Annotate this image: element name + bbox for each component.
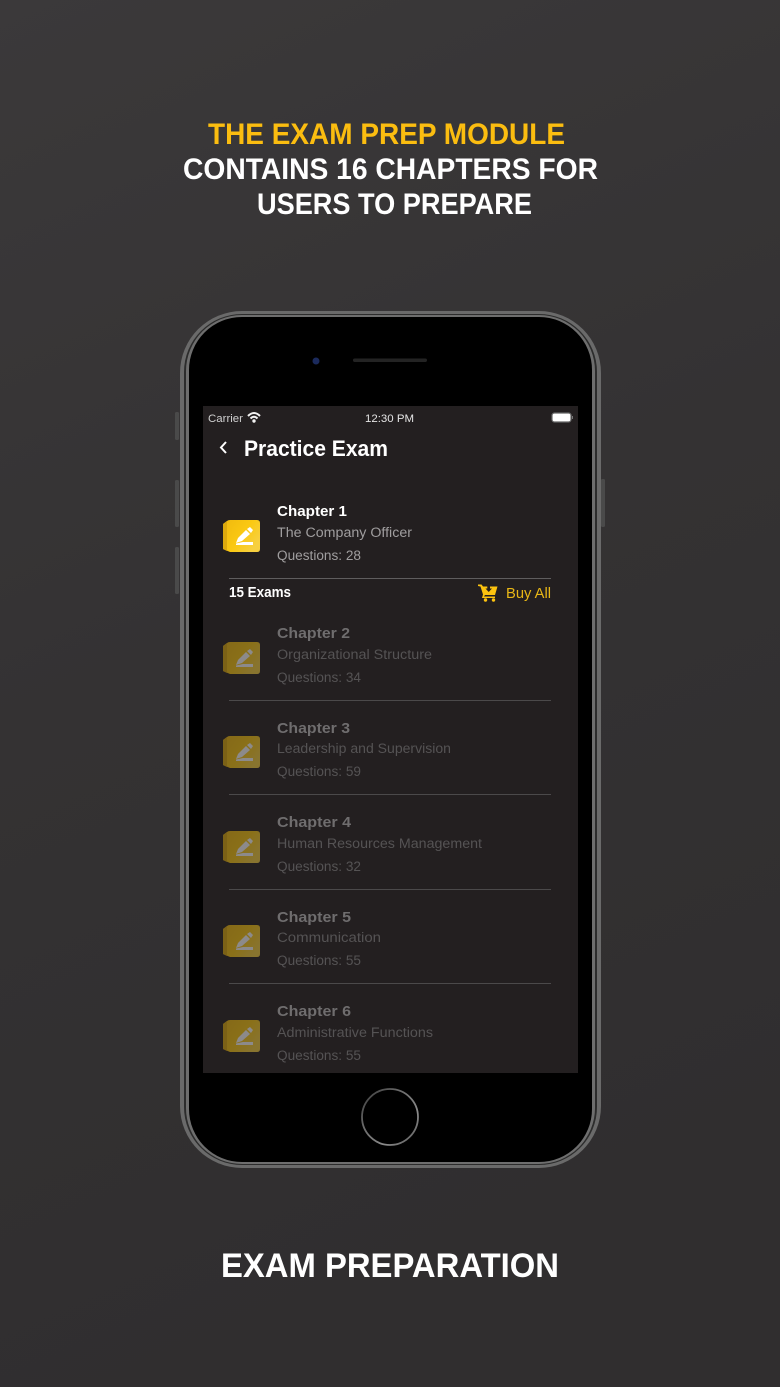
camera — [312, 358, 320, 364]
exams bar: 15 Exams — [229, 585, 291, 601]
home button — [362, 1089, 418, 1145]
chapter 2 row: Chapter 2 — [277, 625, 350, 642]
chapter 4 row: Human Resources Management — [277, 836, 482, 851]
chapter 4 row: Questions: 32 — [277, 859, 361, 874]
chapter 2 row: Questions: 34 — [277, 670, 361, 685]
icon: chapter 4 — [223, 831, 260, 863]
footer title: EXAM PREPARATION — [221, 1247, 559, 1285]
screen — [203, 406, 578, 1073]
exams bar: Buy All — [506, 586, 551, 602]
title: CONTAINS 16 CHAPTERS FOR — [183, 153, 598, 186]
chapter 1 row — [223, 503, 413, 563]
chapter 2 row — [223, 625, 432, 685]
phone body — [180, 311, 601, 1168]
title: THE EXAM PREP MODULE — [208, 118, 565, 151]
chapter 5 row: Chapter 5 — [277, 909, 351, 926]
icon: wifi — [248, 413, 260, 422]
chapter 1 row: The Company Officer — [277, 525, 413, 540]
chapter 5 row — [223, 909, 381, 968]
title: USERS TO PREPARE — [257, 188, 532, 221]
chapter 6 row: Questions: 55 — [277, 1048, 361, 1063]
speaker — [353, 358, 427, 362]
chapter 6 row: Administrative Functions — [277, 1025, 433, 1040]
nav header: Practice Exam — [244, 436, 388, 461]
chapter 6 row: Chapter 6 — [277, 1003, 351, 1020]
icon: chapter 5 — [223, 925, 260, 957]
chapter 3 row: Leadership and Supervision — [277, 741, 451, 756]
chapter 2 row: Organizational Structure — [277, 647, 432, 662]
chapter 3 row: Chapter 3 — [277, 720, 350, 737]
chapter 4 row: Chapter 4 — [277, 814, 352, 831]
exams bar — [229, 584, 551, 602]
status bar: Carrier — [208, 413, 243, 425]
icon: cart — [478, 584, 498, 602]
chapter 5 row: Questions: 55 — [277, 953, 361, 968]
side buttons — [175, 412, 605, 594]
icon: back chevron — [221, 442, 226, 453]
chapter 1 row: Chapter 1 — [277, 503, 347, 520]
icon: chapter 1 — [223, 520, 260, 552]
icon: chapter 2 — [223, 642, 260, 674]
chapter 6 row — [223, 1003, 433, 1063]
chapter 1 row: Questions: 28 — [277, 548, 361, 563]
chapter 5 row: Communication — [277, 930, 381, 945]
phone mockup — [175, 311, 605, 1168]
status bar: 12:30 PM — [365, 413, 414, 425]
chapter 3 row — [223, 720, 451, 779]
status bar — [208, 413, 573, 425]
chapter 4 row — [223, 814, 482, 874]
icon: chapter 6 — [223, 1020, 260, 1052]
title — [183, 118, 598, 221]
icon: battery — [552, 413, 573, 422]
chapter 3 row: Questions: 59 — [277, 764, 361, 779]
icon: chapter 3 — [223, 736, 260, 768]
